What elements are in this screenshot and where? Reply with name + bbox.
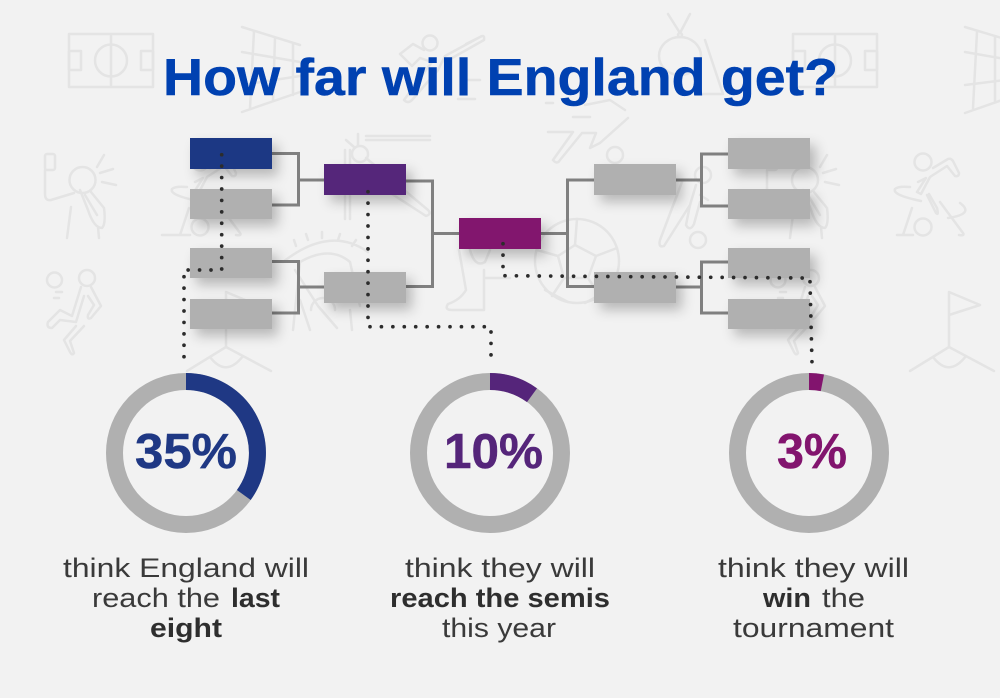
icon: referee left [45,154,116,238]
icon: centre player [447,250,510,310]
icon: football pitch left [69,34,153,87]
icon: juggling player right [770,270,825,354]
bracket connector lines [272,154,728,313]
caption: win [718,553,909,643]
caption: last eight: reach the [92,583,220,613]
dotted leader: last eight [184,155,222,358]
bracket boxes [190,138,810,329]
box: England final [459,218,541,249]
icon: football [535,219,619,303]
box: England semi-final [324,164,406,195]
box: right round 1 b [728,189,810,219]
value 3%: 3% [777,425,847,479]
icon: goal net left [242,27,300,112]
caption: win: tournament [733,613,895,643]
dotted leader: final [503,244,812,363]
background icon pattern [45,14,1000,371]
donut: 3 percent [738,382,880,524]
icon: television antenna [659,14,723,94]
icon: tackling player left [162,154,242,236]
title: How far will England get? [163,49,838,107]
caption: last eight: last [231,583,280,613]
icon: running player with ball top [546,100,628,163]
icon: football pitch right [793,34,877,87]
dotted leader: semis [368,192,491,356]
box: left round 1 c [190,248,272,278]
box: right round 2 a [594,164,676,195]
icon: goal net right [965,27,1000,113]
icon: referee right [767,154,839,238]
caption: last eight: eight [150,613,222,643]
caption: semis [390,553,610,643]
caption: semis: reach the semis [390,583,610,613]
icon: whistle player [345,134,430,219]
caption: win: the [822,583,865,613]
caption: semis: think they will [405,553,595,583]
box: England last eight [190,138,272,169]
donut: 35 percent [114,382,258,524]
caption: semis: this year [442,613,556,643]
donut: 10 percent [418,382,562,524]
box: left round 1 d [190,299,272,329]
box: right round 1 c [728,248,810,278]
box: right round 2 b [594,272,676,303]
caption: win: win [762,583,811,613]
box: right round 1 a [728,138,810,169]
icon: running player with ball centre [660,167,711,248]
box: left round 1 b [190,189,272,219]
value 10%: 10% [444,425,543,479]
icon: corner flag left [187,292,271,371]
box: right round 1 d [728,299,810,329]
icon: crowd arch [283,232,368,330]
value 35%: 35% [135,425,237,479]
box: left round 2 b [324,272,406,303]
icon: corner flag right [910,292,994,371]
icon: juggling player left [47,270,101,354]
caption: last eight [63,553,309,643]
caption: last eight: think England will [63,553,309,583]
icon: volley player [400,36,484,102]
caption: win: think they will [718,553,909,583]
icon: tackling player right [895,154,965,236]
